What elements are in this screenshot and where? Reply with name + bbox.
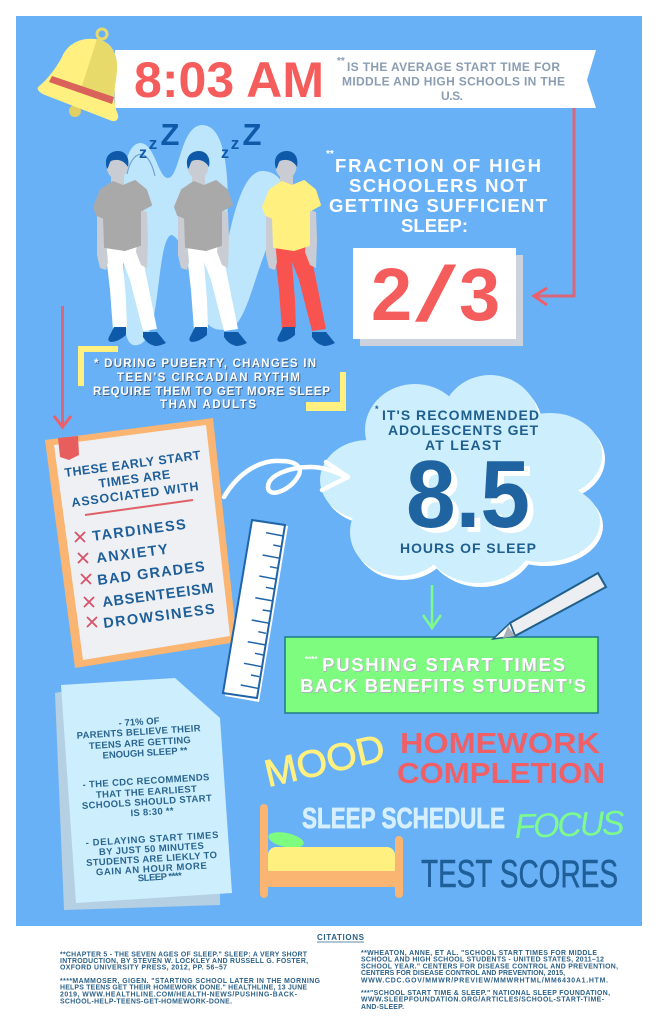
banner: pushing start times back: **** xyxy=(305,655,318,664)
cloud text xyxy=(375,404,539,556)
heading: fraction of high schoolers: GETTING SUFFICIENT xyxy=(329,195,548,216)
citations: right column: AND-SLEEP. xyxy=(361,1004,404,1011)
cloud text: IT'S RECOMMENDED xyxy=(382,407,539,423)
heading: fraction of high schoolers xyxy=(326,149,548,236)
cloud text: HOURS OF SLEEP xyxy=(400,540,536,556)
fact: CDC: IS 8:30 ** xyxy=(130,806,174,819)
list of problems: ABSENTEEISM xyxy=(101,580,215,611)
panel: clipboard of associated problems xyxy=(45,418,237,668)
heading: fraction of high schoolers: ** xyxy=(326,149,334,160)
icon: sleeping Zs, second student: Z xyxy=(243,117,262,152)
fact: CDC: - THE CDC RECOMMENDS xyxy=(82,772,210,791)
x marks xyxy=(75,532,97,627)
heading: citations: CITATIONS xyxy=(317,933,365,942)
cloud: recommended sleep xyxy=(320,375,605,587)
banner text: MIDDLE AND HIGH SCHOOLS IN THE xyxy=(342,74,565,88)
icon: sleeping Zs, second student xyxy=(221,117,262,162)
arrow: white squiggle to cloud xyxy=(224,461,348,497)
fact: delaying start: GAIN AN HOUR MORE xyxy=(96,861,207,878)
heading: fraction of high schoolers: SCHOOLERS NOT xyxy=(349,175,528,196)
icon: bed xyxy=(260,804,403,898)
fact: delaying start: SLEEP **** xyxy=(138,871,182,884)
arrow: green down xyxy=(423,585,441,628)
word: homework completion: HOMEWORK xyxy=(400,728,600,760)
cloud text: 8.5 xyxy=(412,446,536,553)
citations: left column: 2019, WWW.HEALTHLINE.COM/HEALTH-NEWS/PUSHING-BACK- xyxy=(60,992,298,998)
word: mood: MOOD xyxy=(261,727,389,796)
banner text: IS THE AVERAGE START TIME FOR xyxy=(347,60,560,74)
fact: CDC: SCHOOLS SHOULD START xyxy=(82,793,212,812)
stat box: 2/3 xyxy=(353,248,523,346)
citations: right column: **WHEATON, ANNE, ET AL. "SCHOOL START TIMES FOR MIDDLE xyxy=(361,950,597,957)
callout: puberty and circadian rhythm xyxy=(78,346,346,411)
callout: puberty and circadian rhythm: THAN ADULTS xyxy=(160,399,256,411)
cloud text: * xyxy=(375,404,379,414)
word: homework completion xyxy=(397,728,605,790)
icon: ruler xyxy=(223,520,288,702)
stat box: 2/3: / xyxy=(415,251,456,338)
list of problems: BAD GRADES xyxy=(96,559,206,589)
citations: right column: CENTERS FOR DISEASE CONTROL AND PREVENTION, 2015, xyxy=(361,970,565,977)
word: homework completion: COMPLETION xyxy=(397,758,605,790)
word: focus: FOCUS xyxy=(514,804,626,846)
fact: CDC: THAT THE EARLIEST xyxy=(96,784,197,801)
icon: sleeping Zs, first student: z xyxy=(139,145,147,162)
fact: parents: PARENTS BELIEVE THEIR xyxy=(76,723,201,742)
banner text: ** xyxy=(337,56,345,67)
citations: left column: OXFORD UNIVERSITY PRESS, 2012, PP. 56–57 xyxy=(60,964,227,972)
fact: delaying start: - DELAYING START TIMES xyxy=(85,830,219,849)
citations: left column: INTRODUCTION, BY STEVEN W. LOCKLEY AND RUSSELL G. FOSTER, xyxy=(60,958,308,965)
tag xyxy=(58,436,79,460)
banner: pushing start times back xyxy=(285,637,598,713)
banner: average start time xyxy=(115,50,596,108)
citations: left column: HELPS TEENS GET THEIR HOMEWORK DONE." HEALTHLINE, 13 JUNE xyxy=(60,984,307,992)
connector arrow: banner to 2/3 xyxy=(534,107,574,305)
callout: puberty and circadian rhythm: REQUIRE THEM TO GET MORE SLEEP xyxy=(93,386,330,398)
icon: sleeping Zs, first student xyxy=(139,117,180,162)
citations: right column: SCHOOL YEAR." CENTERS FOR DISEASE CONTROL AND PREVENTION, xyxy=(361,964,618,970)
cloud text: ADOLESCENTS GET xyxy=(388,422,538,438)
word: sleep schedule: SLEEP SCHEDULE xyxy=(302,803,505,835)
fact: CDC xyxy=(82,772,212,819)
fact: parents: TEENS ARE GETTING xyxy=(89,735,191,752)
banner text: U.S. xyxy=(441,89,463,103)
citations: left column: **CHAPTER 5 - THE SEVEN AGES OF SLEEP." SLEEP: A VERY SHORT xyxy=(60,952,308,958)
clipboard heading xyxy=(64,448,202,510)
icon: sleeping Zs, second student: z xyxy=(231,134,239,153)
banner: pushing start times back: BACK BENEFITS STUDENT'S xyxy=(300,675,586,696)
callout: puberty and circadian rhythm: * DURING PUBERTY, CHANGES IN xyxy=(94,358,316,370)
citations: right column: WWW.CDC.GOV/MMWR/PREVIEW/MMWRHTML/MM6430A1.HTM. xyxy=(361,978,608,984)
heading: fraction of high schoolers: SLEEP: xyxy=(401,215,468,236)
citations: left column xyxy=(60,952,320,1006)
list of problems xyxy=(91,517,216,632)
fact: delaying start: STUDENTS ARE LIEKLY TO xyxy=(86,850,217,869)
fact: delaying start: BY JUST 50 MINUTES xyxy=(99,841,204,858)
heading: fraction of high schoolers: FRACTION OF HIGH xyxy=(335,155,541,176)
clipboard heading: TIMES ARE xyxy=(98,467,171,491)
cloud text: AT LEAST xyxy=(425,437,501,453)
citations: left column: SCHOOL-HELP-TEENS-GET-HOMEWORK-DONE. xyxy=(60,998,232,1006)
stat box: 2/3: 2 xyxy=(371,253,412,336)
icon: bell xyxy=(38,29,118,121)
cloud text: 8.5 xyxy=(406,441,530,548)
icon: pencil xyxy=(493,573,606,639)
figure: rested student xyxy=(263,151,335,346)
fact: parents xyxy=(76,716,201,762)
icon: sleeping Zs, first student: Z xyxy=(161,117,180,152)
light blue sleep wave xyxy=(122,125,282,345)
callout: puberty and circadian rhythm: TEEN'S CIRCADIAN RYTHM xyxy=(117,372,300,384)
citations: right column xyxy=(361,950,618,1011)
citations: right column: ***"SCHOOL START TIME & SLEEP." NATIONAL SLEEP FOUNDATION, xyxy=(361,990,610,997)
fact: delaying start xyxy=(85,830,219,884)
icon: sleeping Zs, first student: z xyxy=(149,134,157,153)
citations: right column: WWW.SLEEPFOUNDATION.ORG/ARTICLES/SCHOOL-START-TIME- xyxy=(361,996,605,1004)
list of problems: ANXIETY xyxy=(95,542,169,567)
figure: sleepy student 1 xyxy=(94,151,166,346)
arrow: down to clipboard xyxy=(54,306,71,427)
figure: sleepy student 2 xyxy=(175,151,247,346)
citations: left column: ****MAMMOSER, GIGEN. "STARTING SCHOOL LATER IN THE MORNING xyxy=(60,978,320,985)
stat box: 2/3: 3 xyxy=(459,253,500,336)
panel: note paper of facts xyxy=(55,678,232,910)
list of problems: DROWSINESS xyxy=(102,601,216,632)
icon: sleeping Zs, second student: z xyxy=(221,145,229,162)
clipboard heading: THESE EARLY START xyxy=(64,448,202,480)
fact: parents: ENOUGH SLEEP ** xyxy=(102,745,188,762)
list of problems: TARDINESS xyxy=(91,517,187,545)
banner: pushing start times back: PUSHING START TIMES xyxy=(322,654,565,675)
banner text xyxy=(337,56,565,103)
citations: right column: SCHOOL AND HIGH SCHOOL STUDENTS - UNITED STATES, 2011–12 xyxy=(361,956,604,964)
clipboard heading: ASSOCIATED WITH xyxy=(71,479,199,510)
fact: parents: - 71% OF xyxy=(118,716,160,729)
headline time: 8:03 AM xyxy=(134,52,324,108)
